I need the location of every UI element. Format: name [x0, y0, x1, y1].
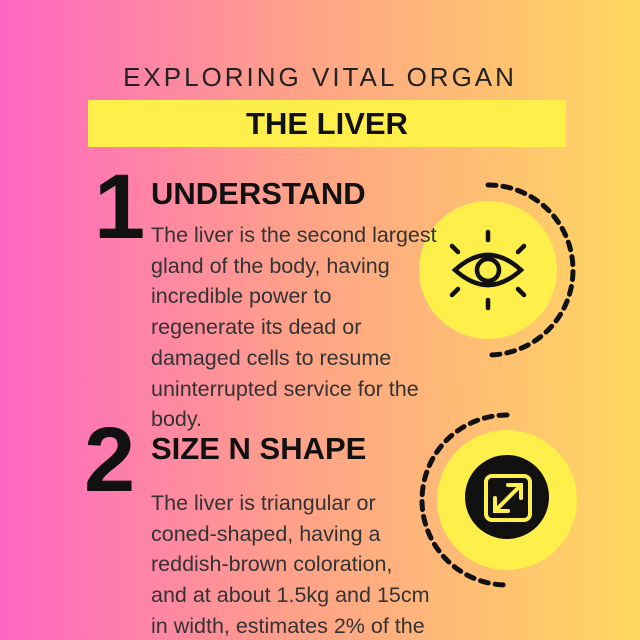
banner	[88, 100, 566, 147]
text 1: incredible power to	[151, 284, 331, 308]
text 2: in width, estimates 2% of the	[151, 614, 425, 638]
text 1: regenerate its dead or	[151, 315, 361, 339]
text 2: and at about 1.5kg and 15cm	[151, 583, 430, 607]
heading 1: UNDERSTAND	[151, 176, 366, 211]
text 1: gland of the body, having	[151, 254, 390, 278]
heading 2: SIZE N SHAPE	[151, 431, 366, 466]
number 1: 1	[94, 156, 145, 258]
text 2: coned-shaped, having a	[151, 522, 381, 546]
banner: THE LIVER	[246, 106, 408, 141]
text 2: reddish-brown coloration,	[151, 552, 392, 576]
title: EXPLORING VITAL ORGAN	[123, 62, 517, 92]
text 2: The liver is triangular or	[151, 491, 376, 515]
number 2: 2	[84, 409, 135, 511]
text 1	[151, 223, 437, 431]
text 1: damaged cells to resume	[151, 346, 391, 370]
text 1: uninterrupted service for the	[151, 377, 419, 401]
text 1: The liver is the second largest	[151, 223, 437, 247]
text 2	[151, 491, 430, 638]
text 1: body.	[151, 407, 202, 431]
